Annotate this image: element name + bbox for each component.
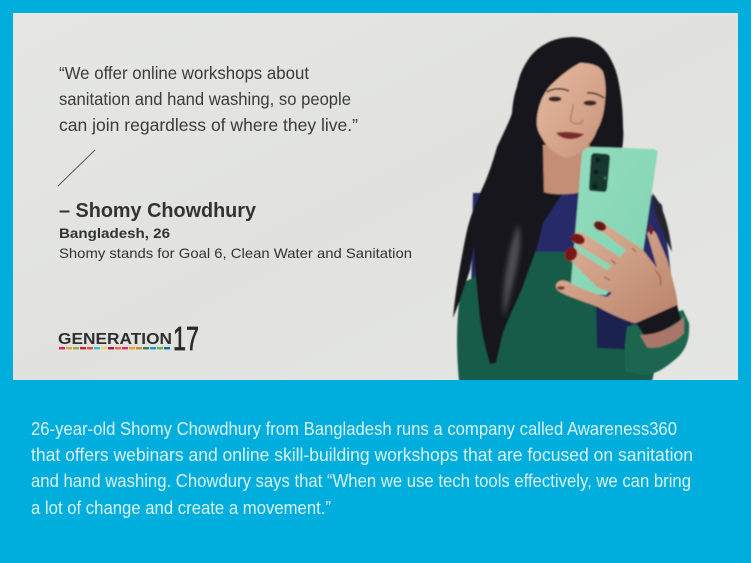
watch — [636, 305, 684, 348]
quote text: sanitation and hand washing, so people — [59, 89, 351, 109]
green shirt — [457, 252, 654, 381]
phone — [571, 147, 658, 295]
body paragraph: and hand washing. Chowdury says that “When we use tech tools effectively, we can bring — [31, 471, 691, 491]
body paragraph: that offers webinars and online skill-building workshops that are focused on sanitation — [31, 445, 693, 465]
right hair strands — [652, 193, 672, 252]
quote text: can join regardless of where they live.” — [59, 115, 358, 135]
right sleeve — [625, 310, 689, 375]
logo: Generation17: 17 — [173, 320, 199, 357]
finger creases — [604, 248, 661, 285]
hair back — [453, 37, 623, 364]
attribution: Bangladesh, 26 — [59, 225, 170, 241]
panel: photo with quote — [13, 13, 738, 381]
attribution — [59, 200, 412, 261]
hair highlight — [504, 225, 520, 318]
eyes and brows — [547, 89, 604, 98]
diagonal slash divider — [58, 150, 95, 186]
navy top — [470, 192, 672, 327]
quote text: “We offer online workshops about — [59, 63, 309, 83]
body paragraph: 26-year-old Shomy Chowdhury from Bangladesh runs a company called Awareness360 — [31, 419, 677, 439]
lips — [556, 132, 584, 139]
neck — [543, 145, 590, 194]
camera module — [589, 153, 610, 192]
body paragraph — [31, 419, 693, 518]
attribution: Shomy stands for Goal 6, Clean Water and Sanitation — [59, 245, 412, 261]
quote text — [59, 63, 358, 135]
person photo illustration — [453, 37, 689, 381]
logo: Generation17 — [58, 320, 199, 357]
attribution: – Shomy Chowdhury — [59, 200, 257, 222]
nose — [571, 104, 583, 124]
logo: Generation17: GENERATION — [58, 331, 172, 348]
body paragraph: a lot of change and create a movement.” — [31, 498, 331, 518]
hand — [556, 219, 678, 323]
dark shirt shadow — [596, 306, 631, 350]
nails — [593, 220, 607, 232]
face — [537, 63, 606, 158]
